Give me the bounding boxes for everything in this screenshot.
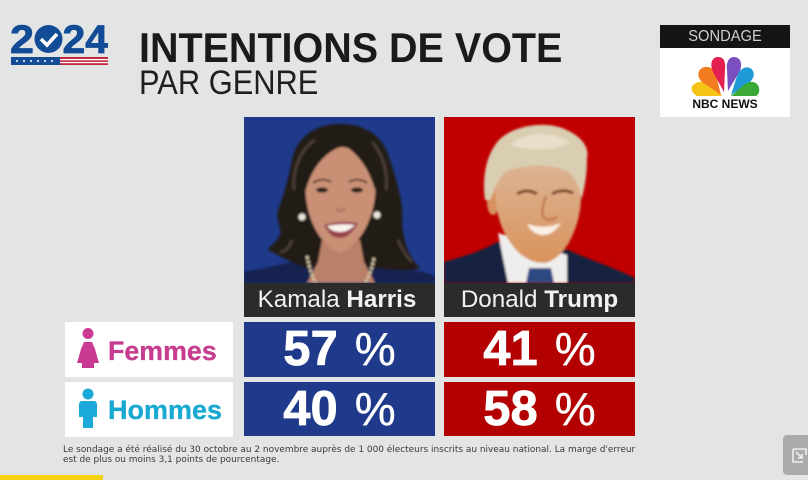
face [495,160,584,263]
collar [498,233,567,283]
earrings [298,214,306,220]
badge heading: SONDAGE [688,28,762,45]
yellow progress bar [0,475,103,480]
value: Trump femmes [444,322,635,377]
icon: NBC peacock [692,57,760,96]
panel: Donald Trump portrait [444,117,635,283]
face [306,147,375,253]
value: Trump hommes: 58 % [483,382,596,436]
candidate name: Trump: Donald Trump [461,286,618,313]
value: Trump hommes [444,382,635,436]
suit [444,242,635,283]
label: Femmes [65,322,233,377]
label text: Femmes [108,336,217,366]
value: Trump femmes: 41 % [483,322,596,376]
hair [268,124,420,270]
candidate name: Harris: Kamala Harris [258,286,416,313]
value: Harris hommes: 40 % [283,382,396,436]
value: Harris hommes [244,382,435,436]
smile [527,223,561,235]
footnote [63,444,636,464]
logo: 2024 election [10,24,108,65]
label: Hommes [65,382,233,437]
icon: man [79,388,97,428]
eyes [517,191,573,194]
value: Harris femmes [244,322,435,377]
lips and teeth [324,222,358,238]
hair [484,125,587,200]
footnote: Le sondage a été réalisé du 30 octobre au 2 novembre auprès de 1 000 électeurs inscrits au niveau national. La marge d'erreur [63,444,635,454]
eyes and brows [313,180,367,183]
nose [336,208,345,211]
icon: woman [77,328,99,368]
jacket [244,258,435,283]
badge heading [660,25,790,48]
candidate name: Trump [444,283,635,317]
panel: Kamala Harris portrait [244,117,435,283]
hair part [300,140,381,190]
badge logo text: NBC NEWS [692,97,758,111]
footnote: est de plus ou moins 3,1 points de pourcentage. [63,454,279,464]
title: INTENTIONS DE VOTE [139,24,562,70]
tie [526,268,554,283]
necklace [307,256,374,283]
candidate name: Harris [244,283,435,317]
icon: exit fullscreen button [783,435,808,475]
nose [542,196,557,220]
label text: Hommes [108,395,222,425]
subtitle: PAR GENRE [139,64,318,102]
ear [487,189,499,215]
hair highlights [280,140,412,262]
value: Harris femmes: 57 % [283,322,396,376]
neck and chest [307,240,375,283]
badge: sondage NBC News [660,25,790,117]
